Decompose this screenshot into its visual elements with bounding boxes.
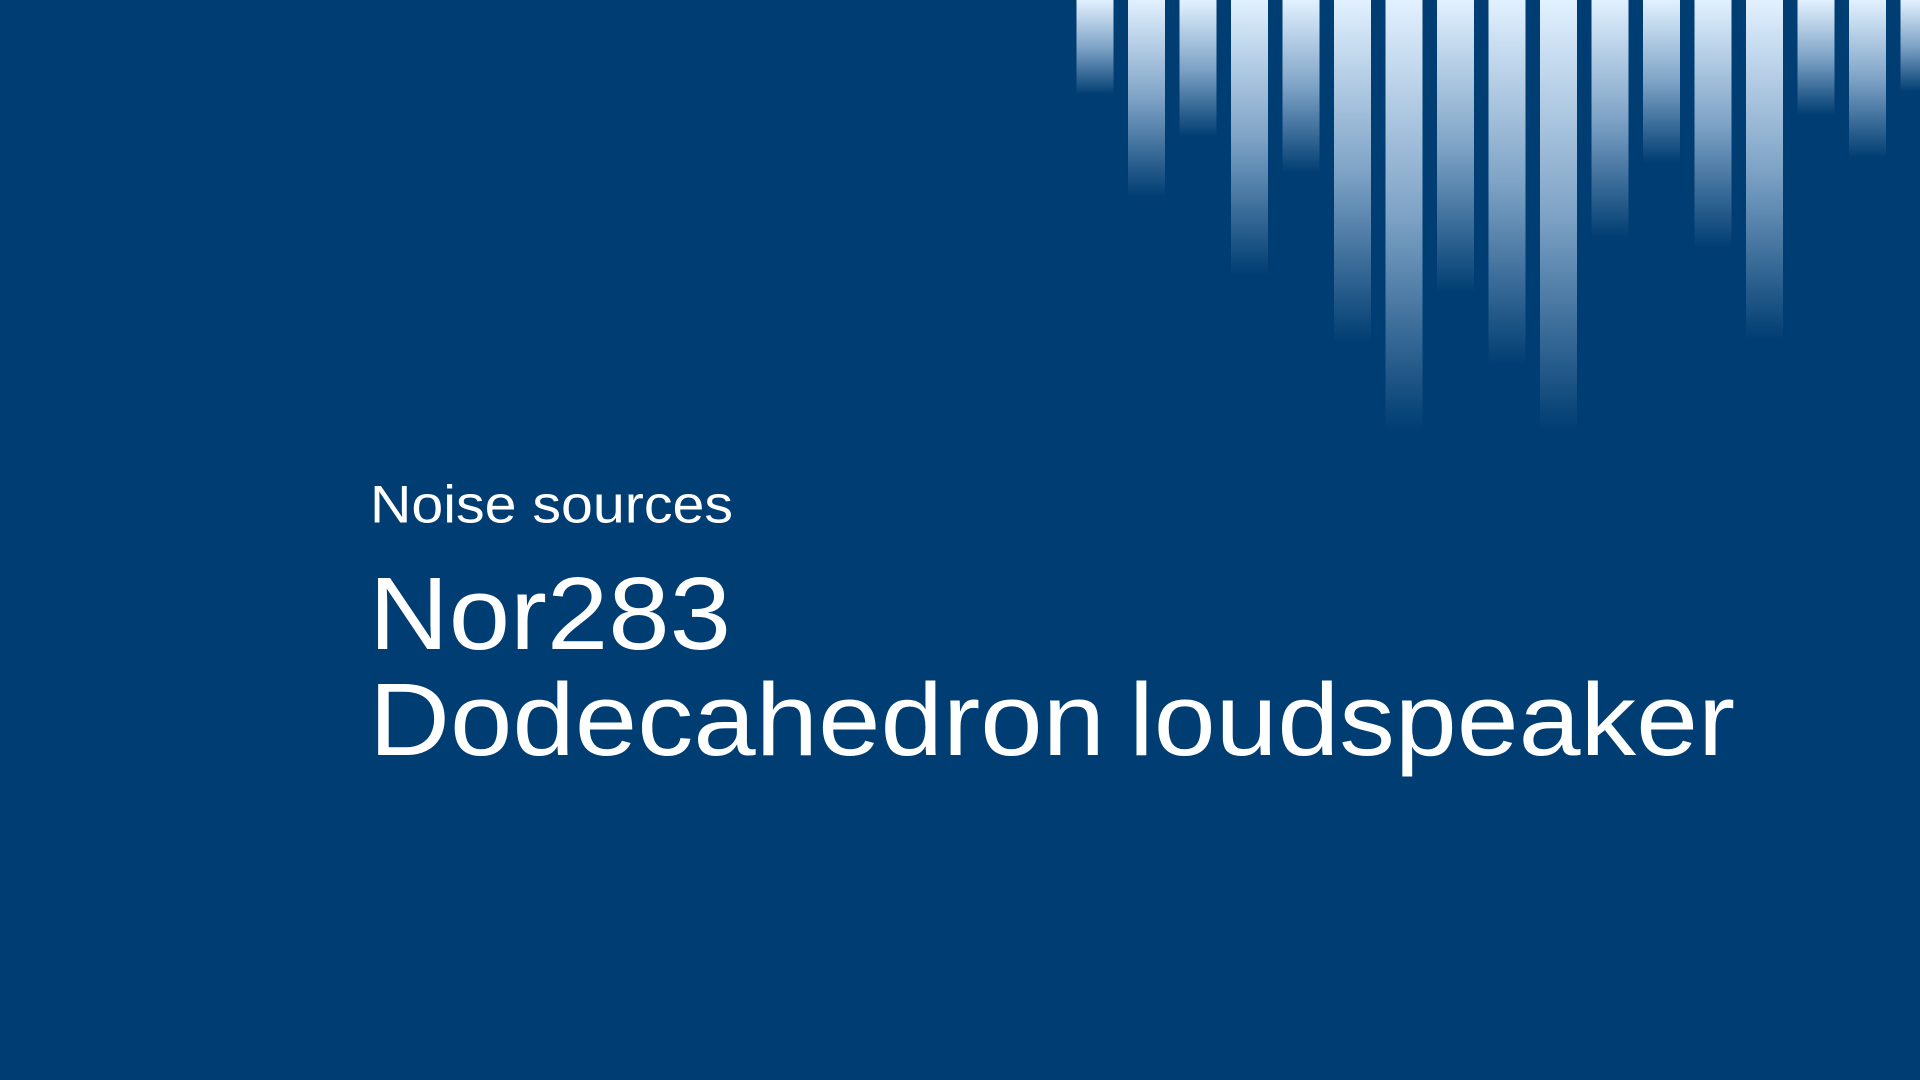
- subtitle: Noise sources: [370, 476, 733, 534]
- title: [369, 556, 1735, 777]
- title: loudspeaker: [1129, 662, 1735, 777]
- decorative sound bars: [1076, 0, 1920, 430]
- title: Dodecahedron: [369, 662, 1105, 777]
- title: Nor283: [369, 556, 731, 671]
